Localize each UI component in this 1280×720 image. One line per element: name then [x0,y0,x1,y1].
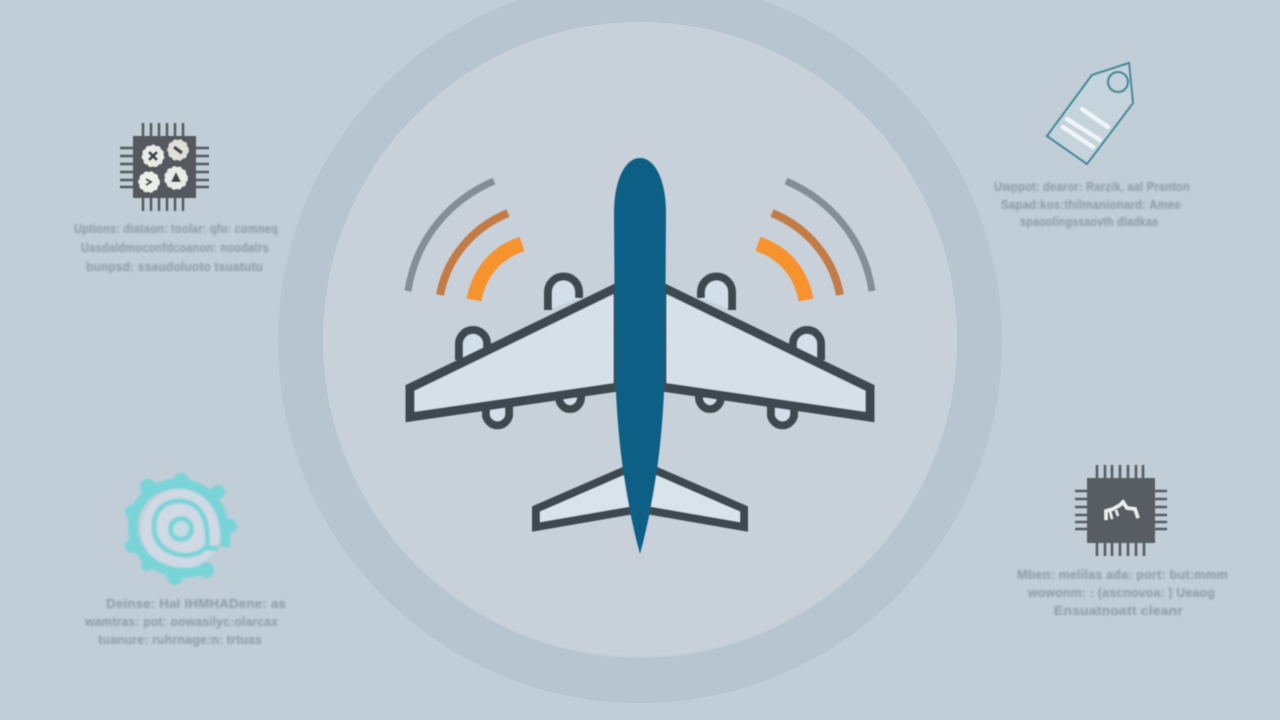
text block: top right: Uwppot: dearor: Rarzik, aal Pranton [994,180,1190,194]
text block: top left [74,222,278,274]
text block: top right: Sapad:kos:thilmanionard: Amee [1001,198,1181,212]
text block: bottom right: wowonm: : (ascnovoa: ) Ueaog [1027,586,1215,600]
text block: top left: Uasdaldmoconfdcoanon: noodatrs [81,241,269,255]
text block: top left: Uptions: diataon: toolar: qfo: comneq [74,222,278,236]
text block: top right: spaoolingssaovth dladkaa [1020,215,1159,229]
text block: top right [994,180,1190,229]
text block: bottom right: Mben: melilas ada: port: but:mmm [1017,568,1228,582]
right wing [662,276,870,425]
left tailplane [536,469,634,527]
icon: price tag [1047,63,1133,164]
text block: bottom right: Ensuatnoatt cleanr [1054,604,1183,618]
right tailplane [646,469,744,527]
text block: bottom left: tuanure: ruhrnage:n: trtuas [98,633,262,647]
text block: bottom left: Deinse: Hal IHMHADene: as [106,597,286,611]
fuselage [614,158,666,554]
left wing [410,276,618,425]
text block: top left: bunpsd: ssaudoluoto tsuatutu [86,260,263,274]
icon: processor with mountain glyph [1075,465,1167,556]
text block: bottom left [84,597,286,647]
airplane illustration [410,158,870,554]
central ring [300,2,980,680]
icon: teal gear [125,473,237,585]
text block: bottom left: wamtras: pot: oowasilyc:olarcax [84,615,278,629]
icon: processor with gears [120,123,209,211]
central disc [323,22,957,656]
left signal waves [408,181,522,300]
text block: bottom right [1017,568,1228,618]
right signal waves [758,181,872,300]
